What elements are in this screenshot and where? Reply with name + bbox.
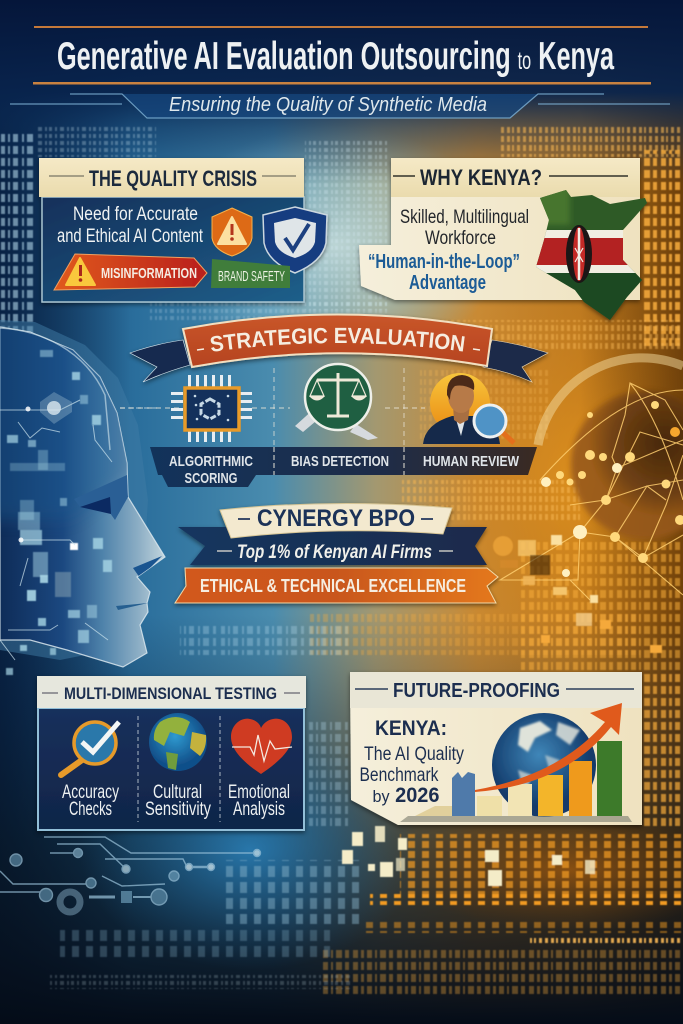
body text: Workforce xyxy=(425,228,496,249)
label: human review: HUMAN REVIEW xyxy=(423,453,520,470)
icon: globe xyxy=(149,713,207,771)
label: accuracy checks xyxy=(62,782,119,820)
subtitle plate xyxy=(10,94,670,118)
ribbon: top 1% xyxy=(178,527,487,565)
label: cultural sensitivity xyxy=(145,782,211,820)
subtitle: Ensuring the Quality of Synthetic Media xyxy=(169,94,487,116)
heading bar xyxy=(37,676,306,708)
body text xyxy=(360,717,464,807)
icon: heart with pulse xyxy=(231,719,292,774)
plate: cynergy bpo: CYNERGY BPO xyxy=(257,505,415,532)
heading bar xyxy=(391,158,640,197)
heading bar xyxy=(350,672,642,708)
panel: multi-dimensional testing xyxy=(37,676,306,830)
network globe xyxy=(493,358,683,653)
ribbon tails xyxy=(130,340,548,382)
tag: misinformation: MISINFORMATION xyxy=(101,265,197,282)
panel: future-proofing xyxy=(350,672,642,825)
body text: Benchmark xyxy=(360,765,439,786)
label: emotional analysis xyxy=(228,782,290,820)
header xyxy=(10,26,670,118)
heading: MULTI-DIMENSIONAL TESTING xyxy=(64,684,277,703)
label: accuracy checks: Checks xyxy=(69,799,112,820)
label: emotional analysis: Emotional xyxy=(228,782,290,803)
callout: “Human-in-the-Loop” xyxy=(368,251,520,273)
label bar xyxy=(150,447,537,487)
panel: the quality crisis xyxy=(39,158,327,302)
icon: scales of justice with magnifier xyxy=(295,364,378,440)
arrow: growth xyxy=(475,703,622,792)
panel: why kenya xyxy=(359,158,650,325)
decorative title rule bottom xyxy=(33,82,651,84)
body text xyxy=(57,204,204,247)
tag: misinformation xyxy=(54,254,207,290)
tag: brand safety: BRAND SAFETY xyxy=(218,268,285,285)
heading bar xyxy=(39,158,304,197)
icon: chip xyxy=(171,375,252,442)
icon: check shield xyxy=(263,207,327,273)
decorative title rule top xyxy=(34,26,648,28)
callout: Advantage xyxy=(409,272,486,294)
label: algorithmic scoring: ALGORITHMIC xyxy=(169,453,253,470)
section: cynergy bpo xyxy=(175,503,498,603)
callout xyxy=(368,251,520,294)
body text: by 2026 xyxy=(372,784,440,807)
ribbon: ethical and technical excellence: ETHICAL & TECHNICAL EXCELLENCE xyxy=(200,576,466,596)
AI face profile xyxy=(0,310,165,675)
banner: strategic evaluation: STRATEGIC EVALUATION xyxy=(210,328,465,352)
icon: warning shield xyxy=(212,208,252,256)
map of kenya with flag xyxy=(536,190,648,324)
label: cultural sensitivity: Cultural xyxy=(153,782,202,803)
heading: THE QUALITY CRISIS xyxy=(89,166,257,191)
plate: cynergy bpo xyxy=(220,503,452,538)
body text xyxy=(400,207,529,249)
ribbon: top 1%: Top 1% of Kenyan AI Firms xyxy=(237,542,432,563)
circuit traces xyxy=(0,837,260,912)
body text: Need for Accurate xyxy=(73,204,198,225)
label: emotional analysis: Analysis xyxy=(233,799,285,820)
heading: FUTURE-PROOFING xyxy=(393,680,560,702)
label: bias detection: BIAS DETECTION xyxy=(291,453,389,470)
section: evaluation methods xyxy=(120,364,537,487)
ribbon: ethical and technical excellence xyxy=(175,568,498,603)
body text: KENYA: xyxy=(375,717,447,740)
label: algorithmic scoring: SCORING xyxy=(184,470,238,487)
body text: The AI Quality xyxy=(364,744,464,765)
heading xyxy=(211,343,466,352)
heading: WHY KENYA? xyxy=(420,165,542,190)
body text: Skilled, Multilingual xyxy=(400,207,529,228)
banner: strategic evaluation xyxy=(129,312,549,386)
tag: brand safety xyxy=(211,259,290,288)
label: cultural sensitivity: Sensitivity xyxy=(145,799,211,820)
body text: and Ethical AI Content xyxy=(57,226,204,247)
icon: person with magnifier xyxy=(423,373,514,444)
icon: accuracy magnifier xyxy=(61,722,119,775)
chart: growth bars with globe xyxy=(400,703,632,822)
label: accuracy checks: Accuracy xyxy=(62,782,119,803)
